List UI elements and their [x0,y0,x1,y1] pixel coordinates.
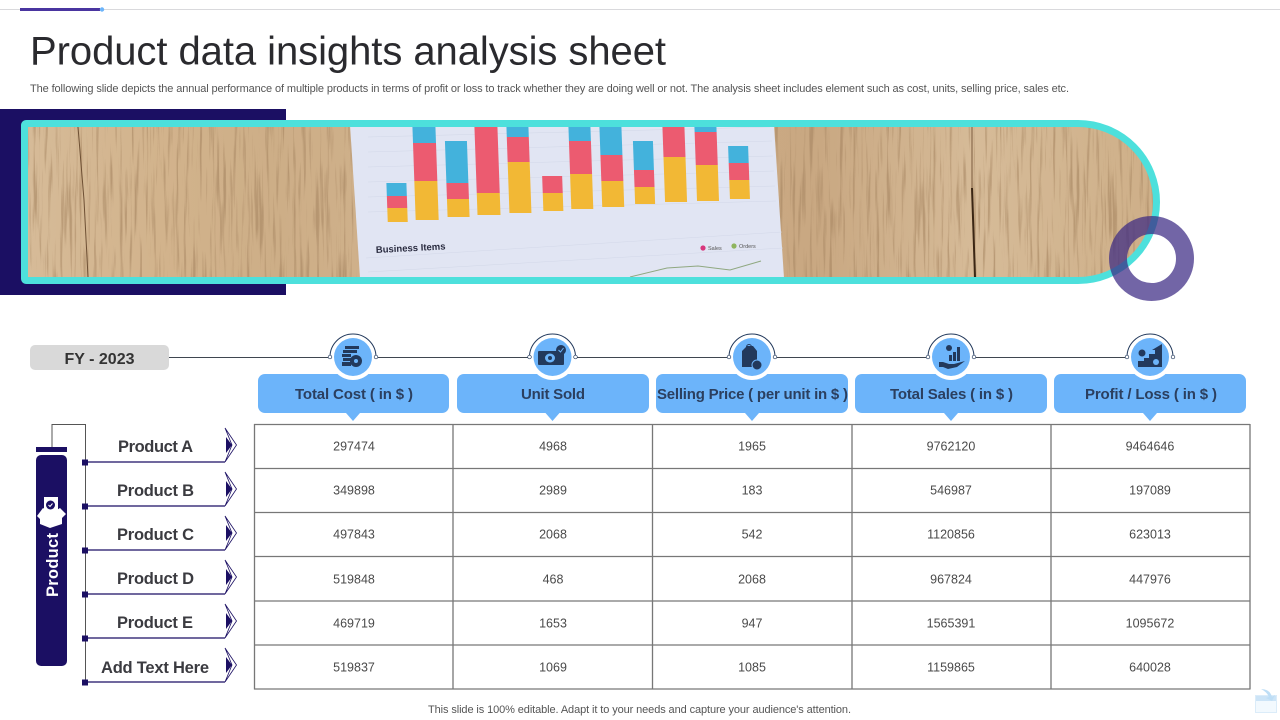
row label: product C [82,516,236,554]
icon: corner folder [1256,689,1276,712]
row: add text: 519837 [333,660,375,674]
row: product B: 197089 [1129,484,1171,498]
row label: add text: Add Text Here [101,659,209,677]
line chart [630,261,761,277]
row label: product A [82,428,236,466]
row: product A: 4968 [539,440,567,454]
column header: total cost [258,334,449,421]
row: product B: 2989 [539,484,567,498]
banner border [24,124,1156,280]
row label: product B: Product B [117,482,194,500]
row: product E: 1653 [539,616,567,630]
column header: selling price: Selling Price ( per unit in $ ) [657,386,848,403]
footer note: This slide is 100% editable. Adapt it to your needs and capture your audience's attention. [428,704,851,716]
row: product A: 9762120 [927,440,975,454]
wood photo [26,125,1158,278]
column header: unit sold [457,334,649,421]
subtitle text: The following slide depicts the annual performance of multiple products in terms of profit or loss to track whether they are doing well or not. The analysis sheet includes element such as cost, units, selling price, sales etc. [30,83,1069,95]
chart legend [700,243,756,252]
row label: product D: Product D [117,570,194,588]
row: product D: 468 [543,572,563,586]
title: Product data insights analysis sheet [30,30,666,74]
banner image panel [24,124,1158,280]
row: add text [333,660,1171,674]
icon: open box [37,497,66,528]
row: add text: 640028 [1129,660,1171,674]
product sidebar [36,424,86,682]
timeline line [169,357,1150,358]
row label: add text [82,648,236,686]
row: product C: 623013 [1129,528,1171,542]
row: product B [333,484,1171,498]
sidebar bar [36,455,67,666]
row label: product A: Product A [118,438,193,456]
row: product E: 947 [742,616,762,630]
row: product E [333,616,1174,630]
column header: profit or loss [1054,334,1246,421]
stacked bar chart [384,125,751,222]
row: product B: 183 [742,484,762,498]
chart legend: Sales [708,246,722,252]
row: product E: 1095672 [1126,616,1174,630]
sidebar label: Product [44,532,62,597]
row: product D: 519848 [333,572,375,586]
column header: total sales: Total Sales ( in $ ) [890,386,1013,403]
column header: selling price [656,334,848,421]
column header: unit sold: Unit Sold [521,386,585,403]
row: product C: 2068 [539,528,567,542]
row: product D: 447976 [1129,572,1171,586]
row: add text: 1159865 [927,660,975,674]
chart paper [350,125,784,278]
connector bracket [52,424,86,682]
icon: price tag [727,334,777,380]
table grid [254,424,1250,690]
row: add text: 1069 [539,660,567,674]
row label: product C: Product C [117,526,194,544]
top accent rule [0,7,1280,12]
row: product B: 546987 [930,484,972,498]
icon: hand with chart [926,334,976,380]
FY label [30,345,169,370]
row: product C: 1120856 [927,528,975,542]
row label: product E: Product E [117,614,193,632]
row: product A [333,440,1174,454]
row: product A: 1965 [738,440,766,454]
FY label: FY - 2023 [65,351,135,368]
row: product C [333,528,1171,542]
column header: total cost: Total Cost ( in $ ) [295,386,413,403]
navy backing block [0,109,286,295]
column header: total sales [855,334,1047,421]
row: product D: 967824 [930,572,972,586]
row: product D [333,572,1171,586]
data table [254,424,1250,690]
row label: product D [82,560,236,598]
row: add text: 1085 [738,660,766,674]
chart legend: Orders [739,244,756,250]
row: product C: 497843 [333,528,375,542]
sidebar cap [36,447,67,452]
column header: profit or loss: Profit / Loss ( in $ ) [1085,386,1217,403]
row: product E: 469719 [333,616,375,630]
row label: product E [82,604,236,642]
ring accent [1118,225,1185,292]
icon: coins [328,334,378,380]
row label: product B [82,472,236,510]
chart caption: Business Items [376,241,446,256]
icon: banknote [528,334,577,380]
icon: growth arrow [1125,334,1175,380]
row: product D: 2068 [738,572,766,586]
row: product A: 9464646 [1126,440,1174,454]
row: product B: 349898 [333,484,375,498]
row: product A: 297474 [333,440,375,454]
row: product E: 1565391 [927,616,975,630]
row: product C: 542 [742,528,762,542]
